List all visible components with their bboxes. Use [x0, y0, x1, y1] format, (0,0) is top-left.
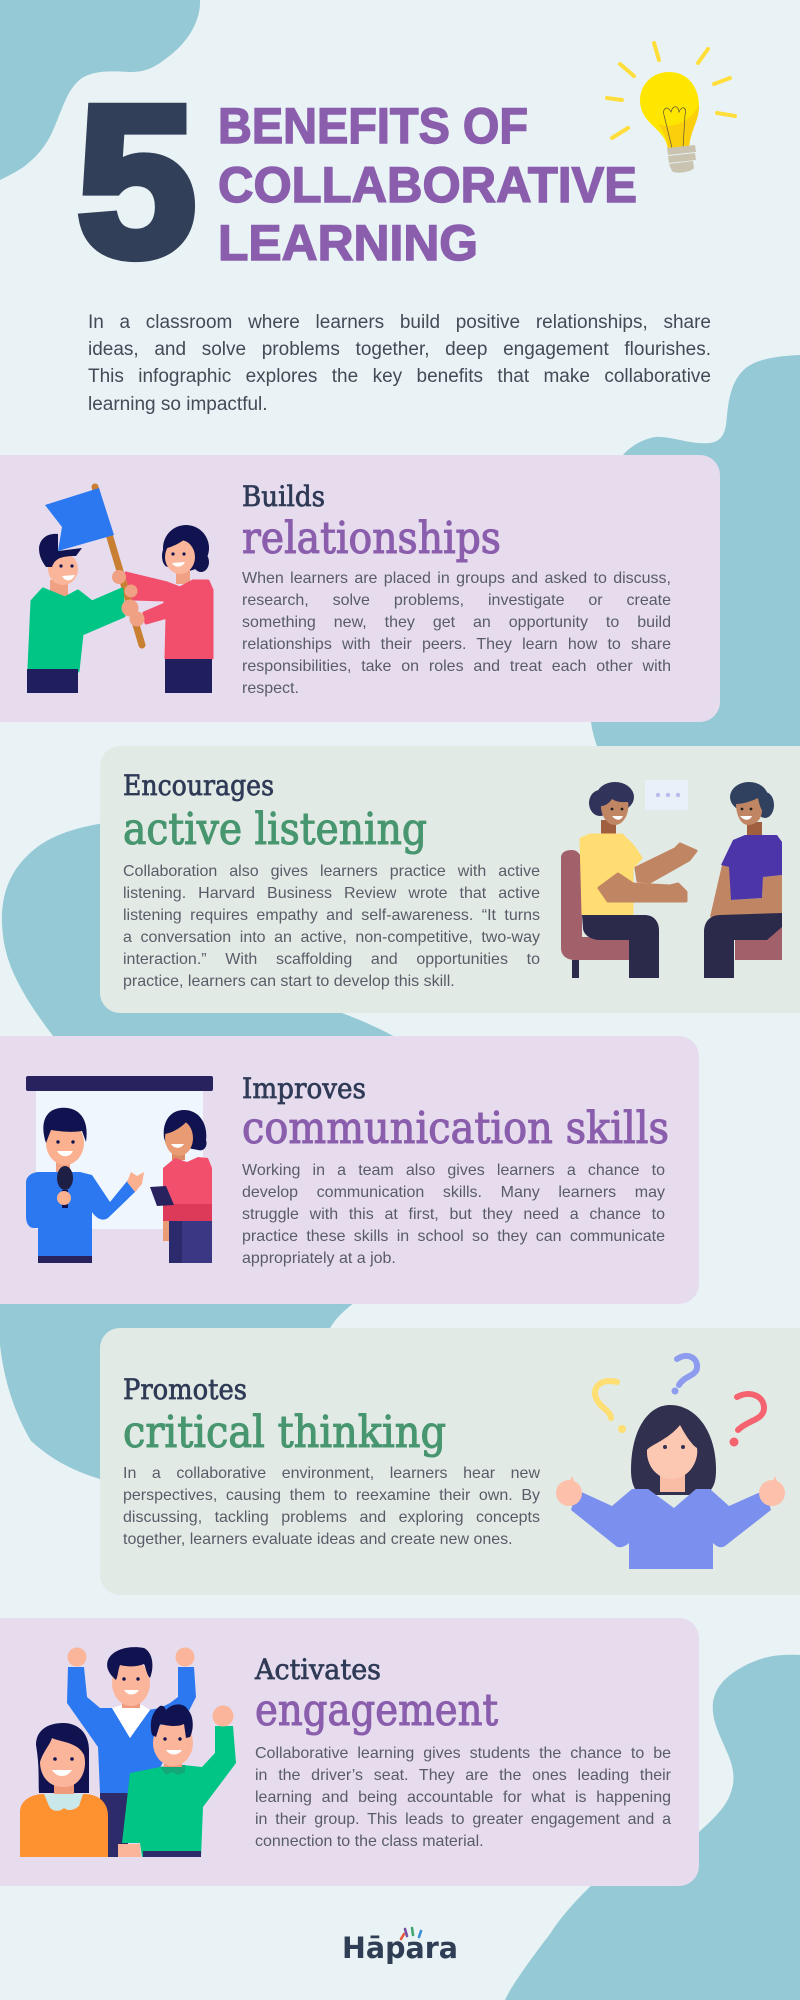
body text: relationships: respect. [242, 680, 299, 697]
body text: engagement: in the driver’s seat. They are the ones leading their [255, 1767, 671, 1784]
body text: active listening: interaction.” With scaffolding and opportunities to [123, 951, 540, 968]
body text: critical thinking: In a collaborative environment, learners hear new [123, 1465, 540, 1482]
body text: active listening: listening requires empathy and self-awareness. “It turns [123, 907, 540, 924]
body text: relationships: When learners are placed in groups and asked to discuss, [242, 570, 671, 587]
panel: improves communication skills [0, 1036, 699, 1304]
intro paragraph [88, 312, 711, 415]
body text: communication skills: practice these skills in school so they can communicate [242, 1228, 665, 1245]
illustration: three cheering learners [20, 1647, 236, 1857]
body text: relationships: responsibilities, take on roles and treat each other with [242, 658, 671, 675]
body text: active listening [123, 863, 540, 990]
intro paragraph: learning so impactful. [88, 394, 268, 415]
body text: relationships [242, 570, 671, 697]
illustration: thinking woman with question marks [556, 1356, 785, 1569]
body text: engagement: Collaborative learning gives students the chance to be [255, 1745, 671, 1762]
body text: communication skills: develop communication skills. Many learners may [242, 1184, 665, 1201]
body text: critical thinking: perspectives, causing them to reexamine their own. By [123, 1487, 540, 1504]
title: benefits of collaborative learning: LEARNING [218, 215, 478, 271]
heading: active listening: active listening [123, 804, 427, 855]
heading: relationships: relationships [242, 513, 501, 564]
illustration: two learners holding a flag [27, 487, 212, 693]
body text: engagement: in their group. This leads to greater engagement and a [255, 1811, 671, 1828]
heading: improves: Improves [242, 1072, 366, 1105]
intro paragraph: In a classroom where learners build positive relationships, share [88, 312, 711, 333]
body text: communication skills: Working in a team also gives learners a chance to [242, 1162, 665, 1179]
body text: communication skills: appropriately at a job. [242, 1250, 396, 1267]
title: benefits of collaborative learning: COLLABORATIVE [218, 157, 637, 213]
body text: critical thinking [123, 1465, 540, 1548]
title: benefits of collaborative learning: BENEFITS OF [218, 98, 528, 154]
intro paragraph: ideas, and solve problems together, deep engagement flourishes. [88, 339, 711, 360]
body text: active listening: Collaboration also gives learners practice with active [123, 863, 540, 880]
illustration: presenter with microphone and colleague at a screen [26, 1076, 213, 1263]
body text: active listening: a conversation into an active, non-competitive, two-way [123, 929, 540, 946]
big number 5: 5 [77, 62, 196, 301]
heading: encourages: Encourages [123, 769, 274, 802]
body text: relationships: relationships with their peers. They learn how to share [242, 636, 671, 653]
body text: active listening: listening. Harvard Business Review wrote that active [123, 885, 540, 902]
body text: engagement: learning and being accountable for what is happening [255, 1789, 671, 1806]
heading: critical thinking: critical thinking [123, 1407, 446, 1458]
body text: communication skills: struggle with this at first, but they need a chance to [242, 1206, 665, 1223]
heading: builds: Builds [242, 480, 325, 513]
body text: communication skills [242, 1162, 665, 1267]
body text: critical thinking: discussing, tackling problems and exploring concepts [123, 1509, 540, 1526]
illustration: two people talking in chairs [561, 780, 782, 978]
body text: relationships: something new, they get an opportunity to build [242, 614, 671, 631]
heading: promotes: Promotes [123, 1373, 247, 1406]
heading: activates: Activates [254, 1653, 381, 1686]
intro paragraph: This infographic explores the key benefits that make collaborative [88, 366, 711, 387]
panel: encourages active listening [100, 746, 800, 1013]
body text: critical thinking: together, learners evaluate ideas and create new ones. [123, 1531, 513, 1548]
logo: Hapara: Hāpara [342, 1931, 458, 1965]
body text: relationships: research, solve problems, investigate or create [242, 592, 671, 609]
panel: builds relationships [0, 455, 720, 722]
panel: promotes critical thinking [100, 1328, 800, 1595]
body text: engagement: connection to the class material. [255, 1833, 484, 1850]
heading: engagement: engagement [255, 1685, 498, 1736]
panel: activates engagement [0, 1618, 699, 1886]
heading: communication skills: communication skills [242, 1103, 669, 1154]
body text: active listening: practice, learners can start to develop this skill. [123, 973, 455, 990]
body text: engagement [255, 1745, 671, 1850]
